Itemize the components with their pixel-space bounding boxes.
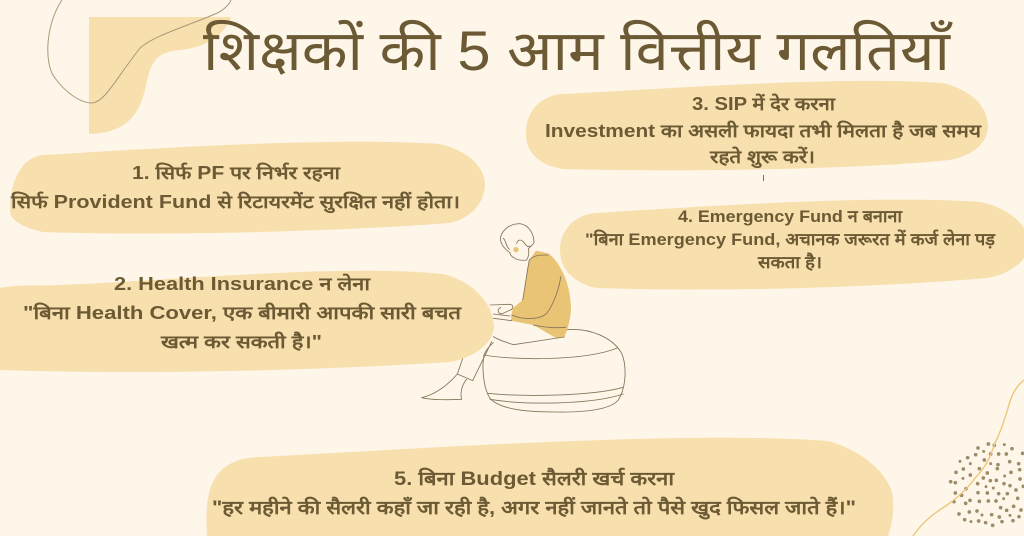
legs bbox=[493, 337, 513, 345]
panel: mistake 3: 3. SIP में देर करना bbox=[692, 93, 836, 114]
sweater outlines bbox=[513, 337, 564, 345]
illustration: person on beanbag bbox=[422, 224, 625, 412]
panel: mistake 1 bbox=[10, 142, 485, 234]
panel: mistake 4: 4. Emergency Fund न बनाना bbox=[678, 207, 903, 226]
small tick mark bbox=[763, 175, 764, 181]
panel: mistake 5: "हर महीने की सैलरी कहाँ जा रही है, अगर नहीं जानते तो पैसे खुद फिसल जाते हैं।" bbox=[212, 496, 856, 520]
dot cluster bbox=[949, 442, 1024, 527]
beanbag bbox=[483, 329, 625, 412]
panel: mistake 2: खत्म कर सकती है।" bbox=[160, 331, 322, 352]
panel: mistake 4: "बिना Emergency Fund, अचानक जरूरत में कर्ज लेना पड़ bbox=[585, 229, 996, 249]
arms and hands bbox=[490, 304, 513, 314]
decorative curved line, bottom right bbox=[913, 380, 1024, 536]
decorative corner shape bbox=[89, 17, 231, 134]
sweater bbox=[511, 251, 571, 338]
panel: mistake 3: रहते शुरू करें। bbox=[709, 146, 815, 169]
panel: mistake 1: 1. सिर्फ PF पर निर्भर रहना bbox=[132, 162, 342, 183]
panel: mistake 3 bbox=[526, 81, 988, 170]
panel: mistake 2: 2. Health Insurance न लेना bbox=[114, 273, 372, 294]
title: शिक्षकों की 5 आम वित्तीय गलतियाँ bbox=[203, 19, 953, 82]
panel: mistake 2 bbox=[0, 271, 494, 372]
head bbox=[500, 224, 534, 260]
decorative corner line bbox=[48, 0, 231, 103]
panel: mistake 5 bbox=[206, 438, 893, 536]
panel: mistake 4 bbox=[560, 200, 1024, 290]
panel: mistake 4: सकता है। bbox=[757, 252, 822, 272]
panel: mistake 2: "बिना Health Cover, एक बीमारी आपकी सारी बचत bbox=[23, 302, 462, 323]
panel: mistake 3: Investment का असली फायदा तभी मिलता है जब समय bbox=[545, 120, 983, 141]
panel: mistake 5: 5. बिना Budget सैलरी खर्च करना bbox=[394, 467, 675, 490]
panel: mistake 1: सिर्फ Provident Fund से रिटायरमेंट सुरक्षित नहीं होता। bbox=[10, 191, 460, 214]
